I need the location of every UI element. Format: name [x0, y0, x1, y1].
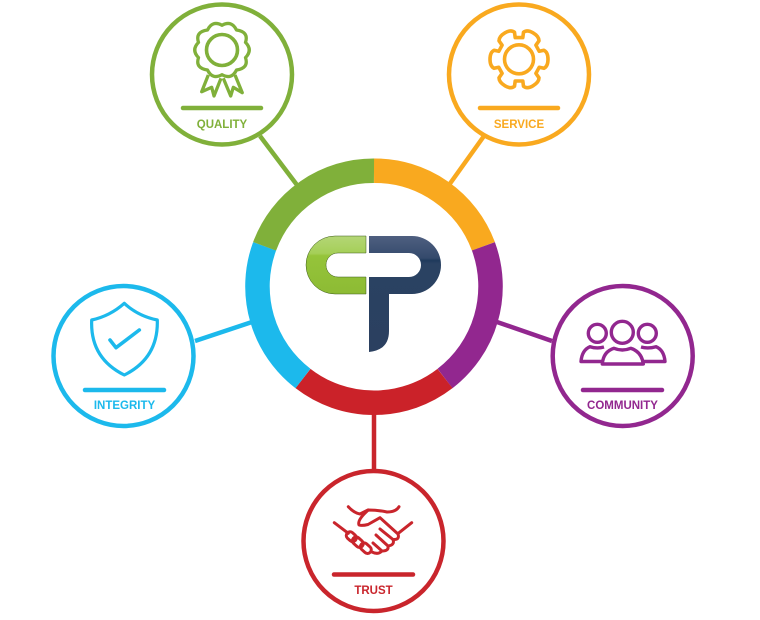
CP logo [306, 236, 441, 352]
icon: award rosette [195, 23, 249, 96]
label: SERVICE [494, 119, 544, 131]
icon: shield with check [92, 303, 157, 375]
divider [583, 388, 662, 392]
divider [480, 106, 558, 110]
logo letter P [369, 236, 441, 352]
badge: trust [304, 471, 444, 611]
icon: people [581, 321, 665, 364]
icon: gear [490, 31, 548, 88]
label: COMMUNITY [587, 400, 658, 412]
badge: service [449, 4, 589, 144]
badge: quality [152, 4, 292, 144]
divider [334, 572, 413, 577]
divider [183, 106, 261, 110]
divider [85, 388, 164, 392]
label: TRUST [354, 585, 393, 597]
logo letter C [306, 236, 366, 294]
label: INTEGRITY [94, 400, 155, 412]
badge: integrity [54, 286, 194, 426]
connector: quality [260, 136, 297, 185]
connector: integrity [195, 322, 252, 341]
connector: community [497, 322, 552, 341]
connector: trust [372, 412, 376, 470]
central ring [257, 171, 491, 403]
icon: handshake [334, 507, 412, 555]
connector: service [449, 136, 484, 185]
badge: community [553, 286, 693, 426]
label: QUALITY [197, 119, 248, 131]
